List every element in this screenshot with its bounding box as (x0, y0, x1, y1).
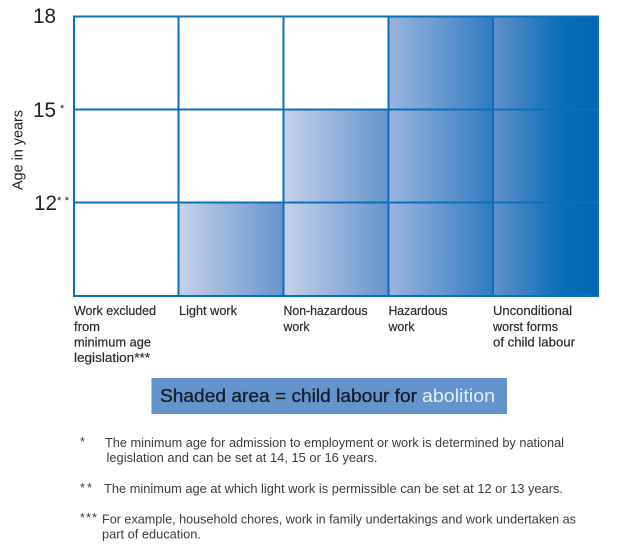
shaded cell: light work under 12 (179, 203, 284, 296)
footnote mark on 12: ** (57, 195, 70, 207)
label: unconditional worst forms: worst forms (492, 319, 558, 334)
label 12: 12 (34, 192, 57, 215)
footnote 2: The minimum age at which light work is permissible can be set at 12 or 13 years. (104, 482, 563, 496)
footnote 2: ** (80, 481, 92, 495)
label: work excluded: Work excluded (74, 303, 156, 318)
highlighted word: abolition (422, 386, 495, 406)
footnote 1: The minimum age for admission to employment or work is determined by national (105, 436, 564, 450)
label: unconditional worst forms: of child labour (493, 334, 576, 350)
legend text: Shaded area = child labour for (160, 386, 417, 406)
age matrix chart (74, 16, 598, 296)
footnote mark on 15: * (60, 103, 65, 115)
label 15: 15 (33, 99, 56, 122)
grid lines (74, 16, 598, 296)
footnote 1: * (80, 435, 85, 449)
legend banner (152, 378, 507, 414)
y axis labels (33, 5, 70, 215)
label: work excluded: from (74, 319, 100, 334)
shaded cells: hazardous work and worst forms (388, 16, 598, 296)
footnote 3: For example, household chores, work in family undertakings and work undertaken as (102, 512, 576, 526)
footnote 3: *** (80, 511, 97, 525)
label: hazardous work: work (388, 319, 415, 334)
label: non-hazardous work: work (283, 319, 310, 334)
shaded cells: non-hazardous work under 15 (284, 110, 388, 296)
label: light work: Light work (179, 303, 237, 318)
footnote 3 (80, 511, 576, 542)
label: hazardous work: Hazardous (388, 303, 448, 318)
label: non-hazardous work: Non-hazardous (284, 303, 368, 318)
footnote 3: part of education. (102, 528, 201, 542)
footnotes (80, 435, 576, 542)
label: work excluded: minimum age (74, 334, 151, 350)
column labels (74, 303, 576, 365)
footnote 1 (80, 435, 564, 465)
label: unconditional worst forms: Unconditional (493, 303, 572, 318)
footnote 1: legislation and can be set at 14, 15 or 16 years. (106, 451, 378, 465)
y axis title: Age in years (10, 110, 26, 190)
label 18: 18 (33, 5, 56, 28)
label: work excluded: legislation*** (74, 350, 150, 365)
